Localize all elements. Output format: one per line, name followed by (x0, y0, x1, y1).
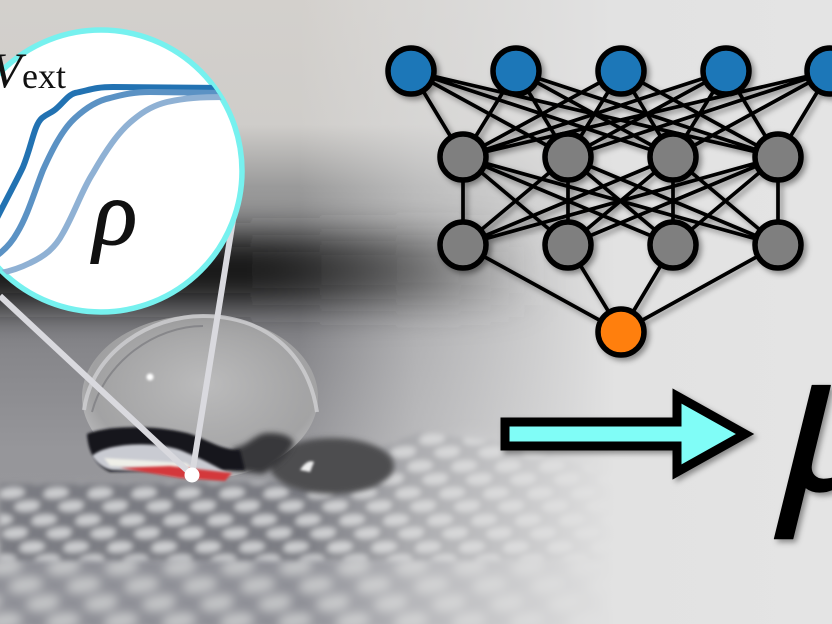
hidden nodes (440, 134, 801, 268)
droplet shadow on fabric (270, 438, 394, 494)
zoom callout lines (0, 220, 233, 482)
fabric surface (0, 430, 660, 624)
arrow (505, 396, 745, 472)
connections (411, 71, 830, 332)
neural network (388, 48, 832, 355)
magnified circle inset (0, 30, 242, 312)
input nodes (388, 48, 832, 94)
magnified circle inset: ext (22, 56, 66, 96)
output node (598, 309, 644, 355)
rho label: ρ (90, 162, 137, 264)
density curves (0, 87, 225, 274)
water droplet (82, 315, 318, 481)
